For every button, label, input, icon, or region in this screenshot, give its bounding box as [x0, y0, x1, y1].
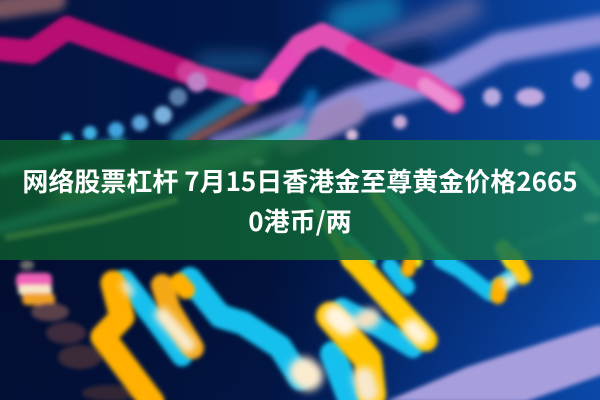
backdrop lines beneath green band — [0, 130, 600, 262]
bottom candlestick chart: cyan lines — [124, 260, 510, 398]
dots along upper chart — [61, 71, 591, 145]
lavender band lower right — [385, 325, 600, 400]
pink line chart — [0, 28, 453, 103]
title line one: 网络股票杠杆 7月15日香港金至尊黄金价格2665 — [22, 162, 578, 199]
bottom left brown and pink blocks — [16, 260, 138, 400]
lower left shading — [0, 260, 600, 400]
highlights on chart lines — [125, 280, 511, 392]
green title band — [0, 140, 600, 260]
title line two: 0港币/两 — [248, 202, 352, 239]
chart backdrop: upper right bands — [0, 0, 600, 142]
bottom candlestick chart: amber lines — [103, 258, 523, 400]
